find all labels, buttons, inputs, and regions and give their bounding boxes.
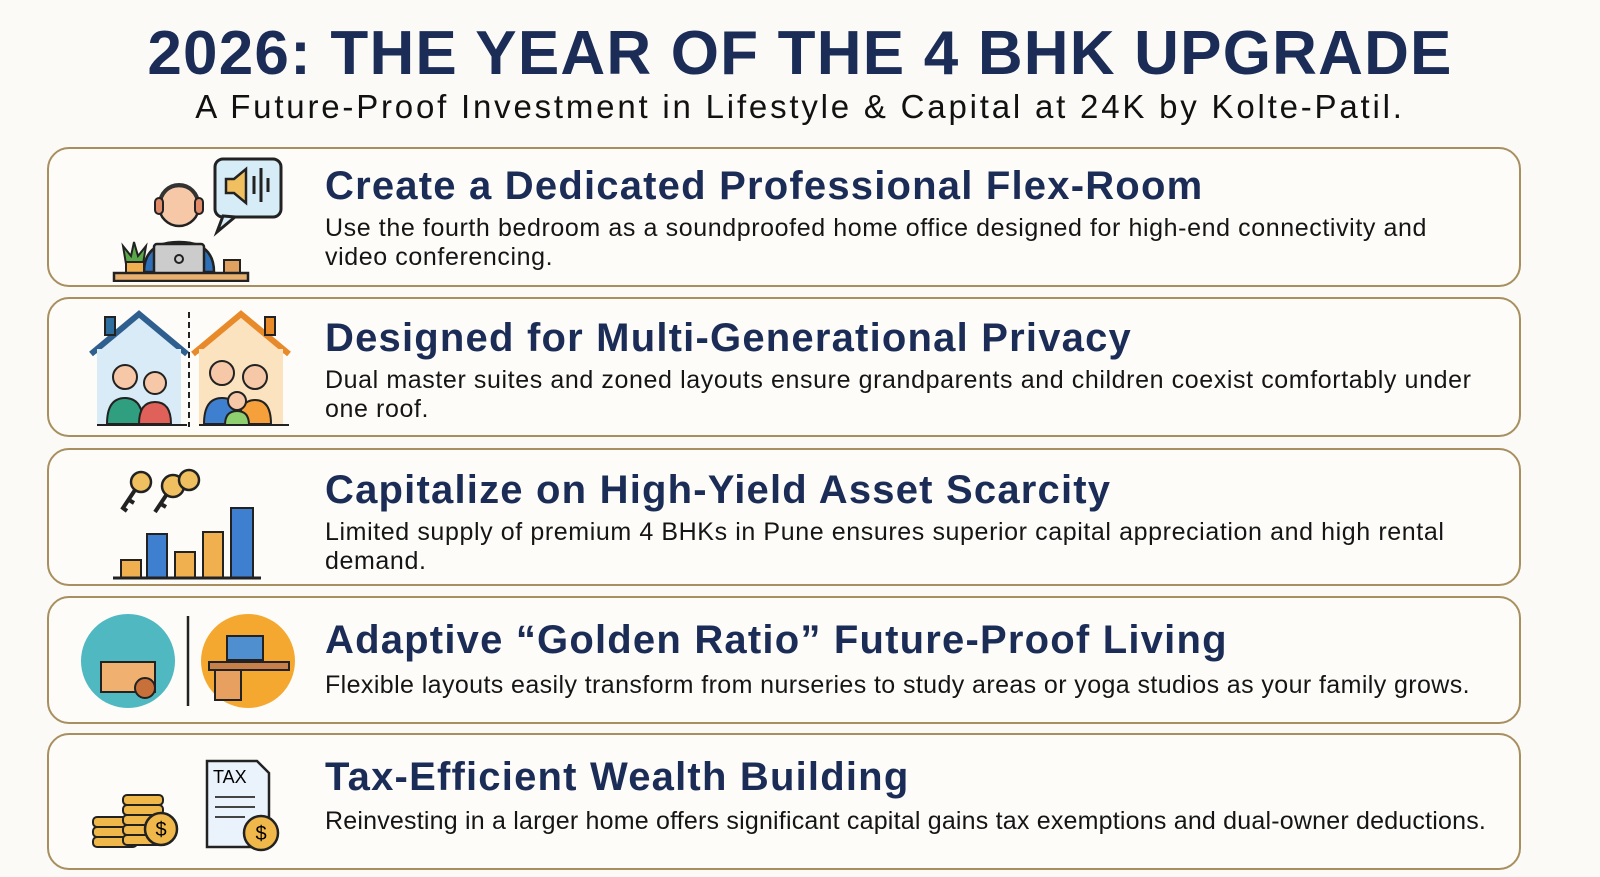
body text: Limited supply of premium 4 BHKs in Pune ensures superior capital appreciation and high rental demand.	[325, 518, 1444, 575]
body text: Flexible layouts easily transform from nurseries to study areas or yoga studios as your family grows.	[325, 671, 1470, 699]
icon: coins and tax form: $	[155, 819, 167, 841]
subtitle: A Future-Proof Investment in Lifestyle & Capital at 24K by Kolte-Patil.	[195, 88, 1405, 125]
icon: coins and tax form: TAX	[213, 767, 247, 787]
panel: tax	[47, 733, 1521, 870]
icon: keys and buildings	[113, 468, 261, 580]
icon: coins and tax form: $	[255, 823, 267, 845]
panel: asset scarcity	[47, 448, 1521, 586]
panel: multi-generational	[47, 297, 1521, 437]
icon: home office	[112, 158, 282, 282]
body text: Dual master suites and zoned layouts ensure grandparents and children coexist comfortably under one roof.	[325, 366, 1472, 423]
body text: Use the fourth bedroom as a soundproofed home office designed for high-end connectivity and video conferencing.	[325, 214, 1427, 271]
title: 2026: THE YEAR OF THE 4 BHK UPGRADE	[147, 19, 1453, 88]
icon: coins and tax form	[92, 760, 280, 852]
icon: nursery and study	[81, 614, 295, 708]
panel: golden ratio	[47, 596, 1521, 724]
heading: Adaptive “Golden Ratio” Future-Proof Living	[325, 618, 1228, 662]
icon: two houses	[89, 310, 291, 427]
body text: Reinvesting in a larger home offers significant capital gains tax exemptions and dual-owner deductions.	[325, 807, 1486, 835]
heading: Create a Dedicated Professional Flex-Room	[325, 164, 1203, 208]
heading: Tax-Efficient Wealth Building	[325, 755, 909, 799]
heading: Designed for Multi-Generational Privacy	[325, 316, 1132, 360]
heading: Capitalize on High-Yield Asset Scarcity	[325, 468, 1111, 512]
panel: flex-room	[47, 147, 1521, 287]
